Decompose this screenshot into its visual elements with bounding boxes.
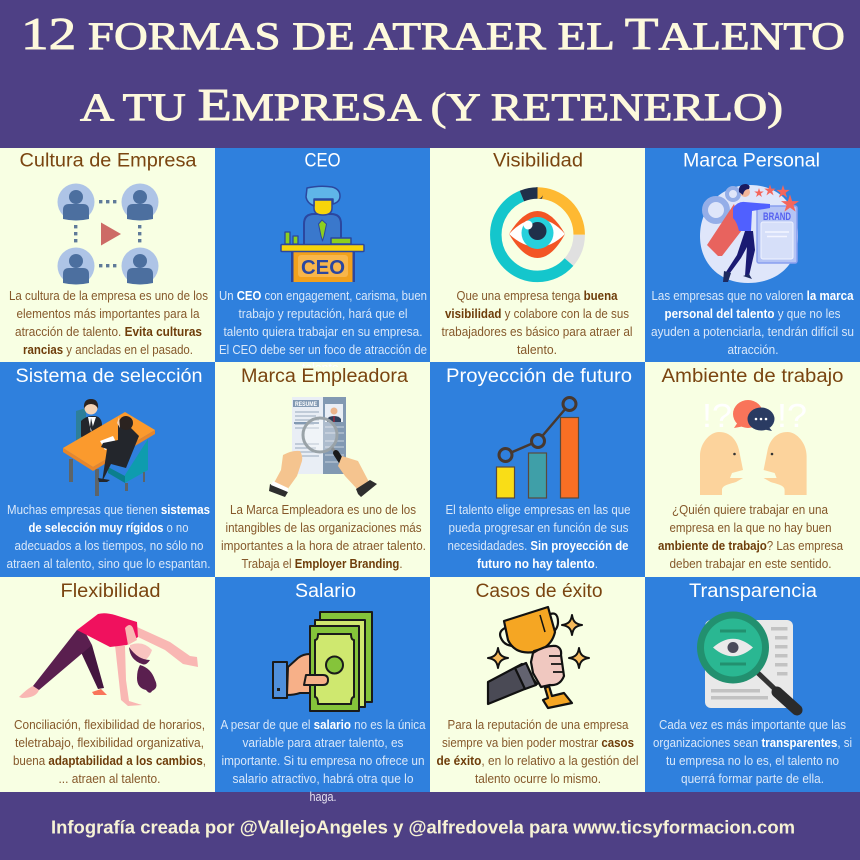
title <box>21 8 845 130</box>
body text: de éxito, en lo relativo a la gestión del <box>436 754 638 768</box>
body text <box>13 718 206 786</box>
body text: La cultura de la empresa es uno de los <box>9 289 208 303</box>
body text: atracción de talento. Evita culturas <box>15 325 202 339</box>
icon: CEO at desk <box>281 186 364 282</box>
panel: Marca Empleadora <box>215 362 430 577</box>
panel: Flexibilidad <box>0 577 215 792</box>
body text: intangibles de las organizaciones más <box>226 521 422 535</box>
panel: Proyección de futuro <box>430 362 645 577</box>
body text: organizaciones sean transparentes, si <box>653 736 852 750</box>
body text: Las empresas que no valoren la marca <box>652 289 854 303</box>
body text: La Marca Empleadora es uno de los <box>230 503 416 517</box>
panel: Transparencia <box>645 577 860 792</box>
icon: personal brand hero <box>700 184 799 283</box>
body text: Que una empresa tenga buena <box>456 289 618 303</box>
heading: Marca Personal <box>683 150 820 172</box>
body text: ... atraen al talento. <box>58 772 160 786</box>
body text: tu empresa no lo es, el talento no <box>666 754 839 768</box>
body text <box>220 718 426 786</box>
heading: Transparencia <box>689 581 817 602</box>
body text: deben trabajar en este sentido. <box>670 557 832 571</box>
body text: elementos más importantes para la <box>16 307 200 321</box>
body text <box>221 503 426 571</box>
body text: necesidadades. Sin proyección de <box>448 539 628 553</box>
icon: growth bar chart <box>496 398 578 498</box>
body text: Trabaja el Employer Branding. <box>242 557 402 571</box>
body text <box>653 718 852 786</box>
body text: personal del talento y que no les <box>664 307 841 321</box>
body text <box>658 503 843 571</box>
heading: CEO <box>304 150 340 172</box>
body text: atracción. <box>728 343 778 357</box>
body text <box>446 503 630 571</box>
body text: visibilidad y colabore con la de sus <box>445 307 629 321</box>
heading: Sistema de selección <box>16 366 202 387</box>
body text: El CEO debe ser un foco de atracción de <box>219 343 427 357</box>
icon: job interview <box>63 399 155 496</box>
icon: eye donut <box>496 193 579 276</box>
title: A TU EMPRESA (Y RETENERLO) <box>80 79 783 130</box>
title: 12 FORMAS DE ATRAER EL TALENTO <box>21 8 845 59</box>
icon: CEO at desk: CEO <box>301 257 345 279</box>
icon: resume inspection <box>269 397 377 497</box>
body text: pueda progresar en función de sus <box>448 521 628 535</box>
body text: Para la reputación de una empresa <box>448 718 628 732</box>
body text: variable para atraer talento, es <box>242 736 404 750</box>
body text: siempre va bien poder mostrar casos <box>442 736 634 750</box>
icon: two talking heads: !? <box>702 397 732 434</box>
heading: Marca Empleadora <box>241 366 408 387</box>
body text: El talento elige empresas en las que <box>446 503 630 517</box>
panel: Casos de éxito <box>430 577 645 792</box>
icon: team network <box>58 184 158 284</box>
body text: teletrabajo, flexibilidad organizativa, <box>15 736 204 750</box>
body text: futuro no hay talento. <box>477 557 598 571</box>
body text: ambiente de trabajo? Las empresa <box>658 539 843 553</box>
panel: Sistema de selección <box>0 362 215 577</box>
body text: talento. <box>517 343 557 357</box>
heading: Cultura de Empresa <box>20 150 197 172</box>
body text: Un CEO con engagement, carisma, buen <box>219 289 427 303</box>
heading: Ambiente de trabajo <box>662 366 844 387</box>
panel: Ambiente de trabajo <box>645 362 860 577</box>
body text <box>6 503 210 571</box>
body text: A pesar de que el salario no es la única <box>220 718 426 732</box>
body text <box>9 289 208 357</box>
body text: adecuados a los tiempos, no sólo no <box>14 539 204 553</box>
icon: stretching woman <box>19 613 198 706</box>
body text: talento ocurre lo mismo. <box>475 772 601 786</box>
heading: Proyección de futuro <box>446 366 632 387</box>
body text: trabajo y reputación, hará que el <box>238 307 408 321</box>
icon: personal brand hero: BRAND <box>763 211 791 223</box>
body text: talento quiera trabajar en su empresa. <box>224 325 422 339</box>
body text: Muchas empresas que tienen sistemas <box>7 503 210 517</box>
icon: two talking heads <box>700 397 807 495</box>
body text: importantes a la hora de atraer talento. <box>221 539 426 553</box>
footer credit: Infografía creada por @VallejoAngeles y @alfredovela para www.ticsyformacion.com <box>51 818 795 838</box>
body text: de selección muy rígidos o no <box>28 521 188 535</box>
panel: Cultura de Empresa <box>0 148 215 362</box>
overflow text: Salario: haga. <box>310 790 336 804</box>
body text <box>219 289 427 357</box>
body text <box>436 718 638 786</box>
heading: Salario <box>295 581 356 602</box>
body text: rancias y ancladas en el pasado. <box>23 343 193 357</box>
panel: CEO <box>215 148 430 362</box>
body text: querrá formar parte de ella. <box>681 772 824 786</box>
body text: buena adaptabilidad a los cambios, <box>13 754 206 768</box>
body text: importante. Si tu empresa no ofrece un <box>222 754 424 768</box>
panel: Salario <box>215 577 430 792</box>
icon: two talking heads: !? <box>777 397 807 434</box>
panel: Marca Personal <box>645 148 860 362</box>
body text <box>651 289 854 357</box>
body text: ¿Quién quiere trabajar en una <box>672 503 828 517</box>
body text: atraen al talento, sino que lo espantan. <box>6 557 210 571</box>
overflow text: CEO: talento. <box>302 361 342 375</box>
icon: trophy in fist <box>488 607 589 708</box>
body text: empresa en la que no hay buen <box>670 521 832 535</box>
icon: resume inspection: RESUME <box>295 402 317 408</box>
body text: salario atractivo, habrá otra que lo <box>232 772 414 786</box>
heading: Casos de éxito <box>476 581 602 602</box>
icon: magnifier over document <box>697 612 797 710</box>
body text: Cada vez es más importante que las <box>659 718 846 732</box>
panel: Visibilidad <box>430 148 645 362</box>
body text: Conciliación, flexibilidad de horarios, <box>14 718 205 732</box>
body text <box>442 289 632 357</box>
icon: hand holding banknotes <box>273 612 372 711</box>
heading: Visibilidad <box>493 150 583 172</box>
heading: Flexibilidad <box>60 581 160 602</box>
body text: trabajadores es básico para atraer al <box>442 325 632 339</box>
